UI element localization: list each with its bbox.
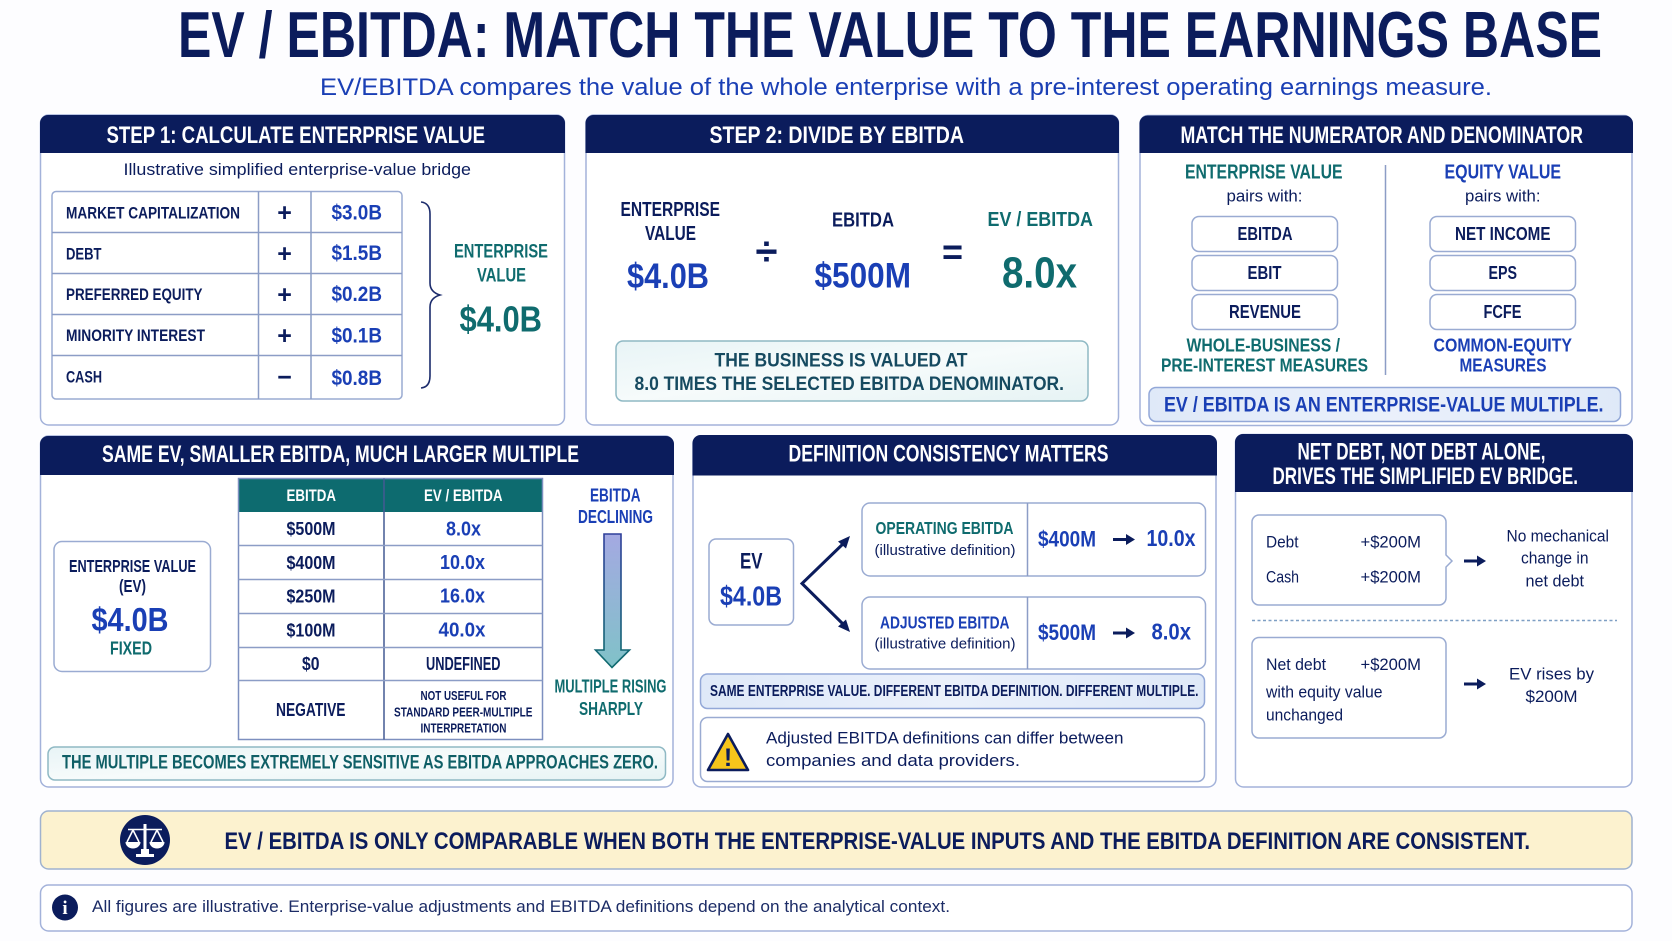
panel: net debt	[1235, 434, 1633, 787]
row: operating ebitda	[862, 503, 1206, 576]
table: sensitivity of multiple	[238, 478, 542, 740]
term: ev / ebitda result	[988, 209, 1093, 298]
row: adjusted ebitda: $500M	[1038, 620, 1096, 645]
icon: warning triangle: !	[724, 744, 732, 772]
table: enterprise value bridge: $3.0B	[332, 202, 382, 224]
term: enterprise value: $4.0B	[627, 257, 709, 296]
table: sensitivity of multiple: $0	[302, 654, 320, 674]
note: adjusted ebitda warning	[700, 718, 1204, 782]
icon: info	[52, 894, 78, 920]
column: equity value pairs: EQUITY VALUE	[1444, 162, 1561, 184]
table: sensitivity of multiple: 40.0x	[438, 620, 486, 642]
card: net debt with equity value unchanged: unchanged	[1266, 706, 1343, 724]
icon: info: i	[62, 898, 68, 919]
card: debt and cash: +$200M	[1360, 568, 1421, 586]
callout: different multiple	[700, 674, 1204, 708]
table: enterprise value bridge: +	[277, 322, 292, 350]
term: ebitda: $500M	[814, 256, 911, 296]
heading: same ev: SAME EV, SMALLER EBITDA, MUCH LARGER MULTIPLE	[102, 441, 579, 468]
row: adjusted ebitda: (illustrative definition)	[874, 636, 1016, 652]
text: ev rises	[1509, 664, 1594, 706]
callout: different multiple: SAME ENTERPRISE VALUE. DIFFERENT EBITDA DEFINITION. DIFFERENT MULTIPLE.	[710, 683, 1198, 700]
icon: warning triangle	[708, 734, 748, 772]
column: enterprise value pairs: pairs with:	[1226, 186, 1302, 206]
table: enterprise value bridge: $0.1B	[332, 324, 382, 348]
table: sensitivity of multiple: NEGATIVE	[276, 700, 346, 720]
table: sensitivity of multiple: EV / EBITDA	[424, 486, 502, 505]
label: multiple rising sharply: SHARPLY	[579, 699, 643, 719]
heading: definition consistency: DEFINITION CONSISTENCY MATTERS	[788, 440, 1108, 468]
heading: net debt	[1272, 438, 1578, 490]
panel: match the numerator and denominator	[1140, 116, 1633, 426]
text: ev rises: $200M	[1526, 687, 1578, 706]
banner: key takeaway	[40, 811, 1632, 869]
text: disclaimer: All figures are illustrative. Enterprise-value adjustments and EBITDA definitions depend on the analytical context.	[92, 898, 950, 916]
text: no mechanical change	[1506, 528, 1609, 590]
table: sensitivity of multiple: $500M	[286, 519, 336, 539]
term: ebitda	[814, 210, 911, 296]
text: no mechanical change: change in	[1521, 550, 1588, 568]
table: enterprise value bridge: +	[277, 240, 292, 268]
table: enterprise value bridge: −	[277, 364, 292, 392]
label: ebitda declining	[578, 486, 653, 527]
row: adjusted ebitda: 8.0x	[1152, 618, 1191, 644]
table: enterprise value bridge: MARKET CAPITALIZATION	[66, 204, 240, 222]
result: enterprise value: VALUE	[477, 266, 526, 286]
table: sensitivity of multiple: UNDEFINED	[426, 654, 500, 674]
table: enterprise value bridge: $0.2B	[332, 283, 382, 306]
row: operating ebitda: 10.0x	[1146, 525, 1196, 551]
column: enterprise value pairs: REVENUE	[1229, 302, 1301, 322]
footer note	[40, 885, 1632, 931]
table: enterprise value bridge: CASH	[66, 368, 102, 386]
arrows: branch	[802, 536, 850, 632]
column: enterprise value pairs: PRE-INTEREST MEASURES	[1161, 356, 1368, 376]
column: enterprise value pairs: EBITDA	[1238, 224, 1292, 244]
operator: equals: =	[942, 231, 963, 272]
panel: definition consistency matters	[692, 435, 1217, 787]
callout: meaning of multiple: 8.0 TIMES THE SELECTED EBITDA DENOMINATOR.	[634, 374, 1064, 395]
table: sensitivity of multiple: $250M	[286, 586, 336, 606]
icon: brace	[421, 202, 440, 388]
panel: step 1 calculate enterprise value	[40, 115, 565, 425]
column: equity value pairs	[1430, 162, 1576, 376]
result: enterprise value: ENTERPRISE	[454, 242, 548, 262]
callout: sensitivity: THE MULTIPLE BECOMES EXTREMELY SENSITIVE AS EBITDA APPROACHES ZERO.	[62, 752, 658, 774]
column: equity value pairs: NET INCOME	[1455, 224, 1550, 244]
card: enterprise value fixed: (EV)	[119, 576, 146, 596]
callout: enterprise-value multiple	[1149, 388, 1620, 422]
column: equity value pairs: MEASURES	[1460, 356, 1546, 376]
row: operating ebitda: OPERATING EBITDA	[876, 518, 1014, 538]
label: ebitda declining: EBITDA	[590, 486, 640, 506]
callout: enterprise-value multiple: EV / EBITDA IS AN ENTERPRISE-VALUE MULTIPLE.	[1164, 394, 1604, 416]
card: enterprise value fixed: FIXED	[110, 638, 152, 658]
card: debt and cash: Debt	[1266, 532, 1299, 552]
subtitle: EV/EBITDA compares the value of the whole enterprise with a pre-interest operating earnings measure.	[320, 74, 1492, 101]
card: net debt with equity value unchanged: with equity value	[1265, 682, 1382, 702]
panel: same ev, smaller ebitda	[40, 436, 674, 787]
text: ev rises: EV rises by	[1509, 664, 1594, 684]
result: enterprise value: $4.0B	[460, 298, 542, 340]
table: sensitivity of multiple: $400M	[286, 553, 336, 573]
card: enterprise value fixed: $4.0B	[92, 601, 168, 638]
callout: sensitivity	[48, 747, 666, 780]
label: multiple rising sharply	[554, 676, 666, 719]
card: debt and cash	[1252, 515, 1452, 605]
term: ev / ebitda result: EV / EBITDA	[988, 209, 1093, 231]
column: equity value pairs: FCFE	[1484, 302, 1522, 322]
table: enterprise value bridge: PREFERRED EQUITY	[66, 285, 203, 304]
table: sensitivity of multiple: $100M	[286, 620, 336, 640]
card: net debt with equity value unchanged	[1252, 638, 1446, 738]
column: equity value pairs: pairs with:	[1465, 186, 1540, 206]
row: operating ebitda: $400M	[1038, 526, 1096, 552]
table: sensitivity of multiple: 10.0x	[440, 552, 485, 574]
panel: step 2 divide by ebitda	[586, 115, 1119, 425]
label: ebitda declining: DECLINING	[578, 507, 653, 527]
card: debt and cash: Cash	[1266, 568, 1299, 586]
table: enterprise value bridge: DEBT	[66, 244, 102, 264]
column: equity value pairs: EPS	[1488, 263, 1517, 283]
column: enterprise value pairs: EBIT	[1248, 263, 1282, 283]
arrow: to ev rises	[1464, 678, 1486, 690]
table: enterprise value bridge: $1.5B	[332, 242, 382, 265]
table: sensitivity of multiple: EBITDA	[286, 486, 336, 505]
text: no mechanical change: net debt	[1526, 572, 1584, 590]
card: net debt with equity value unchanged: +$200M	[1360, 655, 1421, 674]
column: enterprise value pairs: WHOLE-BUSINESS /	[1186, 336, 1340, 356]
heading: net debt: NET DEBT, NOT DEBT ALONE,	[1298, 438, 1546, 466]
card: ev: EV	[740, 548, 763, 574]
term: enterprise value: ENTERPRISE	[620, 199, 720, 221]
caption: bridge: Illustrative simplified enterprise-value bridge	[124, 161, 471, 179]
note: adjusted ebitda warning: companies and data providers.	[766, 751, 1020, 770]
card: enterprise value fixed: ENTERPRISE VALUE	[69, 556, 196, 576]
row: operating ebitda: (illustrative definition)	[874, 543, 1016, 559]
card: ev	[709, 539, 794, 625]
table: enterprise value bridge: +	[277, 281, 292, 309]
table: sensitivity of multiple: 16.0x	[440, 586, 485, 608]
column: equity value pairs: COMMON-EQUITY	[1434, 336, 1572, 356]
row: adjusted ebitda	[862, 597, 1206, 669]
term: enterprise value	[620, 199, 720, 296]
callout: meaning of multiple	[616, 341, 1088, 401]
term: ebitda: EBITDA	[832, 210, 894, 232]
column: enterprise value pairs	[1161, 162, 1368, 376]
operator: divide: ÷	[756, 230, 778, 274]
result: enterprise value	[454, 242, 548, 340]
table: enterprise value bridge: $0.8B	[332, 367, 382, 390]
term: enterprise value: VALUE	[645, 223, 696, 245]
card: debt and cash: +$200M	[1360, 532, 1421, 552]
text: no mechanical change: No mechanical	[1506, 528, 1609, 546]
icon: scales	[120, 815, 170, 865]
arrow: declining down	[596, 534, 630, 668]
callout: meaning of multiple: THE BUSINESS IS VALUED AT	[714, 350, 968, 372]
note: adjusted ebitda warning: Adjusted EBITDA definitions can differ between	[766, 728, 1124, 748]
table: sensitivity of multiple: INTERPRETATION	[420, 720, 506, 736]
table: enterprise value bridge	[52, 192, 402, 399]
label: multiple rising sharply: MULTIPLE RISING	[554, 676, 666, 696]
column: enterprise value pairs: ENTERPRISE VALUE	[1185, 162, 1342, 184]
table: sensitivity of multiple: STANDARD PEER-MULTIPLE	[394, 704, 533, 720]
term: ev / ebitda result: 8.0x	[1002, 248, 1077, 298]
table: sensitivity of multiple: NOT USEFUL FOR	[420, 688, 507, 703]
card: enterprise value fixed	[54, 542, 210, 672]
arrow: to no change	[1464, 556, 1486, 566]
table: enterprise value bridge: MINORITY INTEREST	[66, 326, 205, 345]
table: sensitivity of multiple: 8.0x	[446, 518, 481, 540]
card: ev: $4.0B	[720, 580, 782, 612]
table: enterprise value bridge: +	[277, 199, 292, 227]
card: net debt with equity value unchanged: Net debt	[1266, 655, 1326, 674]
heading: step 2: STEP 2: DIVIDE BY EBITDA	[710, 122, 964, 149]
heading: step 1: STEP 1: CALCULATE ENTERPRISE VALUE	[106, 122, 485, 149]
row: adjusted ebitda: ADJUSTED EBITDA	[880, 612, 1010, 632]
